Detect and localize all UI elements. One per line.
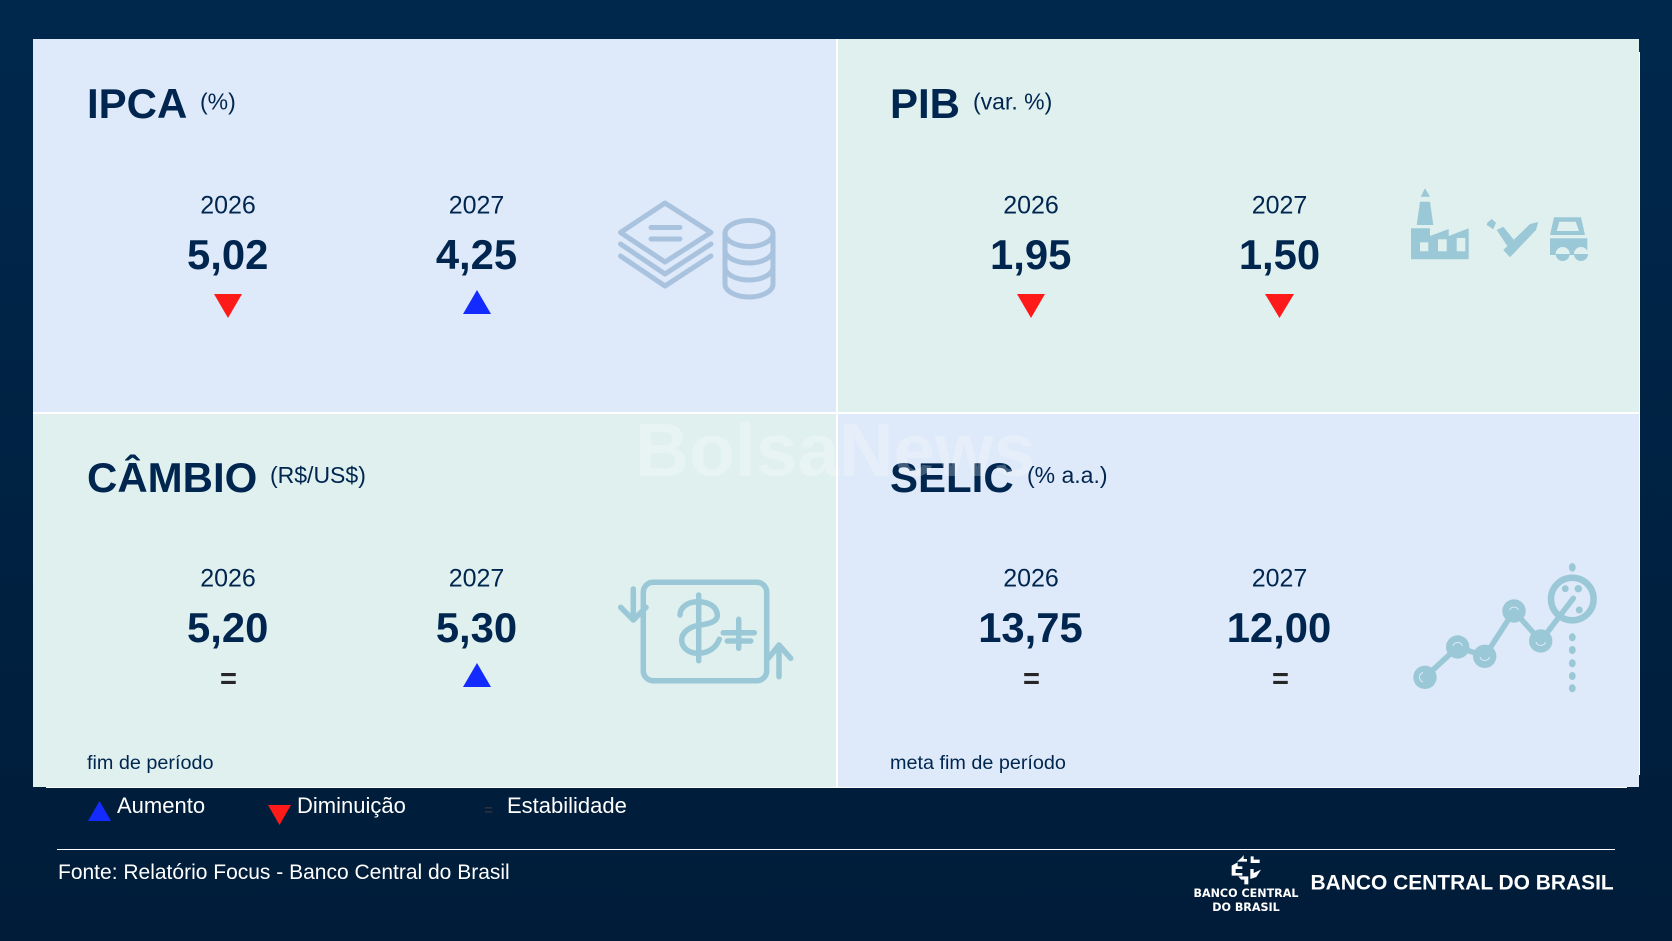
legend: estabilidade: = (484, 802, 493, 819)
icon: currency exchange (621, 582, 791, 681)
CÂMBIO 2027 value: 5,30 (436, 604, 517, 651)
heading: IPCA (87, 80, 236, 127)
PIB 2026 value: 2026 (1003, 191, 1059, 219)
panel: SELIC (838, 414, 1639, 787)
CÂMBIO 2026 value: 5,20 (187, 604, 268, 651)
SELIC 2026 value: 13,75 (978, 604, 1083, 651)
CÂMBIO 2027 value: 2027 (449, 564, 504, 592)
heading: SELIC: SELIC (890, 454, 1014, 501)
IPCA 2027 value (436, 191, 517, 314)
IPCA 2027 value: 4,25 (436, 231, 517, 278)
icon: stacked bills and coins (620, 203, 773, 297)
legend: estabilidade: Estabilidade (507, 793, 627, 818)
legend: diminuição: Diminuição (297, 793, 406, 818)
CÂMBIO 2026 value (187, 564, 268, 695)
heading: PIB: PIB (890, 80, 960, 127)
PIB 2026 value (990, 191, 1071, 318)
IPCA 2026 value: 5,02 (187, 231, 268, 278)
legend: aumento: Aumento (117, 793, 205, 818)
SELIC 2027 value: = (1272, 663, 1289, 695)
heading: IPCA: IPCA (87, 80, 187, 127)
SELIC 2027 value: 2027 (1252, 564, 1307, 592)
CÂMBIO 2027 value (436, 564, 517, 687)
SELIC 2026 value: 2026 (1003, 564, 1059, 592)
logo: Banco Central do Brasil: DO BRASIL (1212, 901, 1280, 914)
source line: Fonte: Relatório Focus - Banco Central do Brasil (58, 861, 510, 884)
SELIC 2027 value: 12,00 (1227, 604, 1331, 651)
icon: rising line chart with target (1413, 563, 1594, 692)
panel: IPCA (33, 39, 836, 412)
logo: Banco Central do Brasil: BANCO CENTRAL (1194, 887, 1298, 900)
note: meta fim de período: meta fim de período (890, 752, 1066, 774)
heading: IPCA: (%) (200, 88, 236, 114)
footer title: Banco Central do Brasil: BANCO CENTRAL DO BRASIL (1310, 872, 1614, 894)
logo: Banco Central do Brasil (1194, 855, 1298, 914)
heading: CÂMBIO: CÂMBIO (87, 453, 257, 501)
icon: factory, farm tool and car (1411, 188, 1588, 261)
heading: CÂMBIO (87, 453, 366, 501)
IPCA 2026 value (187, 191, 268, 318)
legend: diminuição (268, 793, 406, 825)
PIB 2027 value (1239, 191, 1320, 318)
PIB 2027 value: 2027 (1252, 191, 1307, 219)
IPCA 2026 value: 2026 (200, 191, 256, 219)
SELIC 2026 value (978, 564, 1083, 695)
watermark: BolsaNews: BolsaNews (635, 408, 1035, 492)
panel: PIB (838, 39, 1639, 412)
legend: aumento (88, 793, 205, 821)
panel: CÂMBIO (33, 414, 836, 787)
heading: PIB (890, 80, 1052, 127)
CÂMBIO 2026 value: 2026 (200, 564, 256, 592)
CÂMBIO 2026 value: = (220, 663, 237, 695)
note: fim de período: fim de período (87, 752, 213, 774)
PIB 2026 value: 1,95 (990, 231, 1071, 278)
heading: SELIC (890, 454, 1108, 501)
heading: SELIC: (% a.a.) (1027, 462, 1108, 488)
IPCA 2027 value: 2027 (449, 191, 504, 219)
legend (88, 793, 627, 825)
PIB 2027 value: 1,50 (1239, 231, 1320, 278)
SELIC 2027 value (1227, 564, 1331, 695)
heading: CÂMBIO: (R$/US$) (270, 462, 366, 488)
heading: PIB: (var. %) (973, 88, 1052, 114)
SELIC 2026 value: = (1023, 663, 1040, 695)
